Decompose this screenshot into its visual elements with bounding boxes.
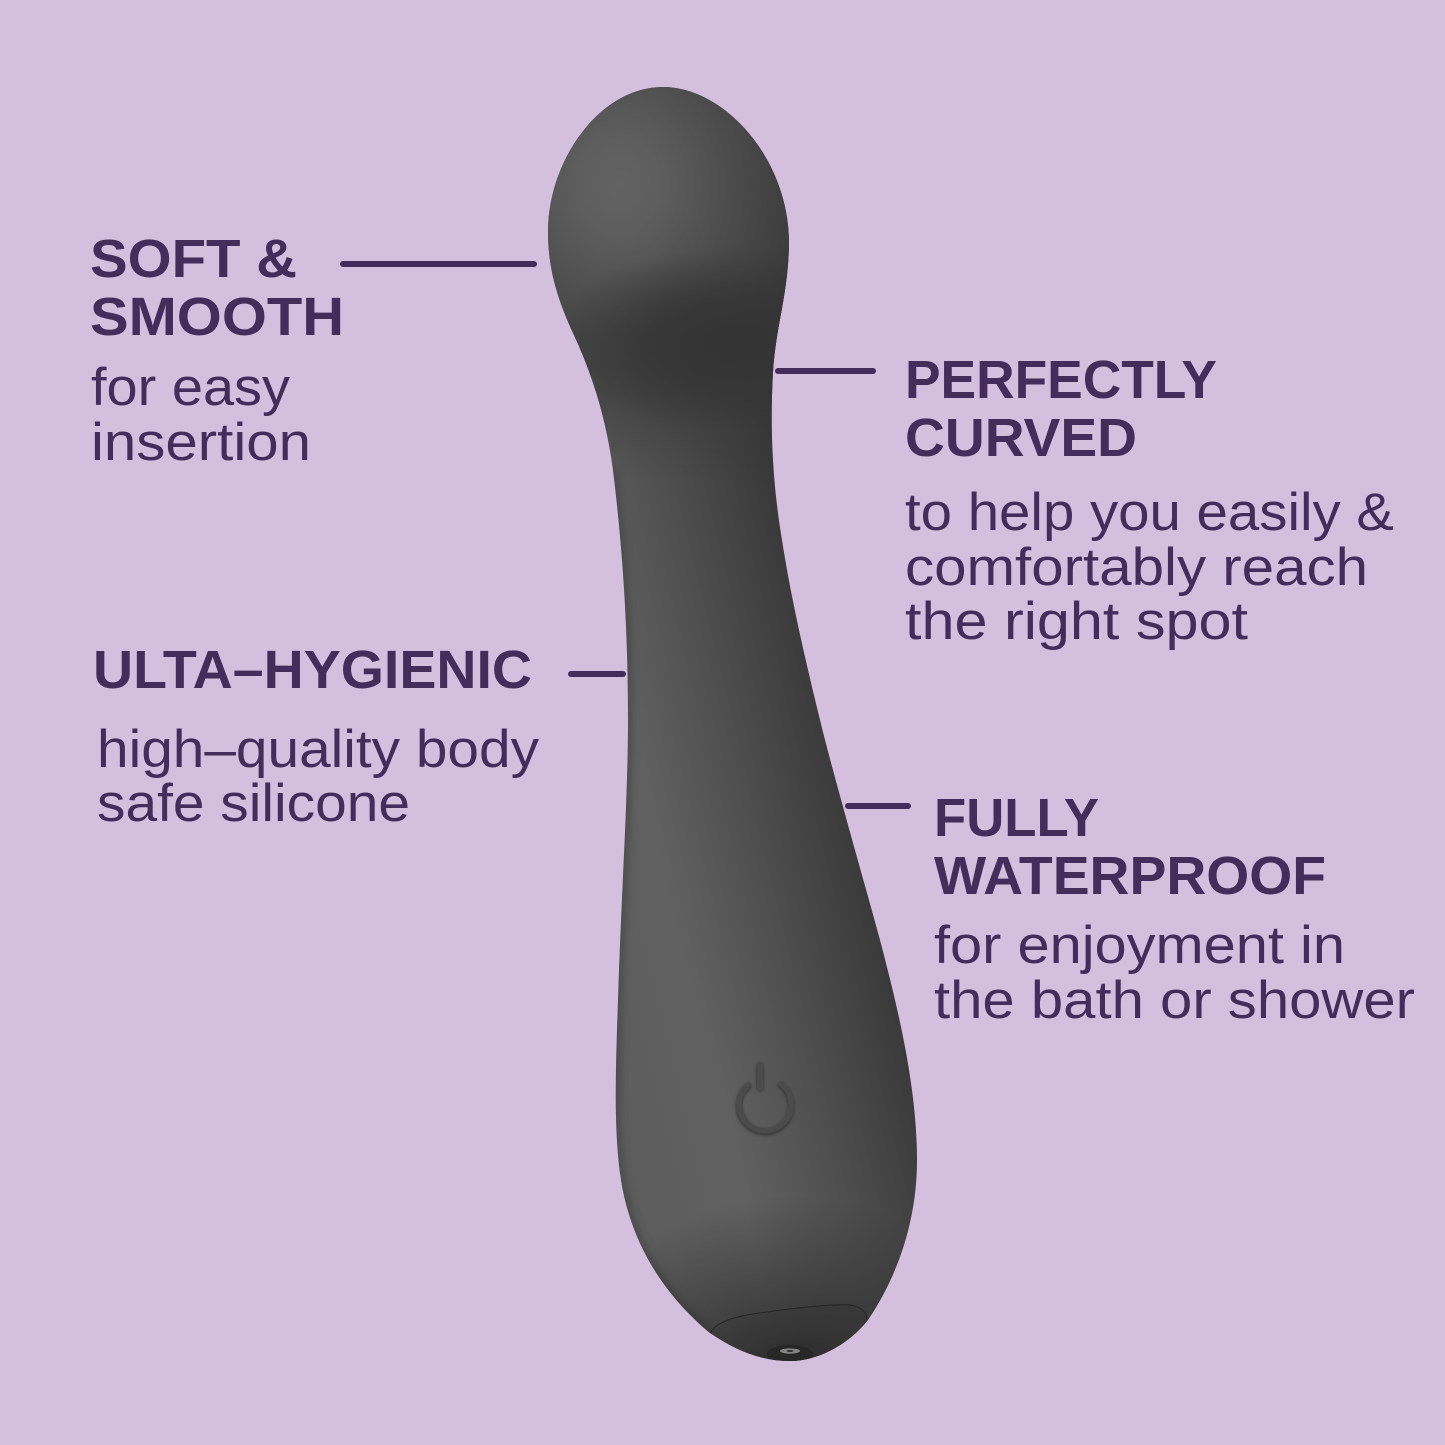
feature: perfectly curved: the right spot [905, 592, 1248, 651]
feature: ultra hygienic: ULTA–HYGIENIC [93, 640, 532, 700]
base cap tone [710, 1305, 867, 1370]
feature: fully waterproof: the bath or shower [934, 971, 1415, 1030]
shading: head tone [548, 87, 789, 455]
feature: fully waterproof: WATERPROOF [934, 846, 1326, 906]
feature: soft and smooth: for easy [91, 358, 291, 417]
feature: perfectly curved: PERFECTLY [905, 350, 1217, 410]
feature: perfectly curved [905, 350, 1394, 651]
product: curved silicone device [548, 87, 917, 1361]
callout line: fully waterproof [845, 803, 911, 809]
feature: fully waterproof: FULLY [934, 788, 1099, 848]
callout line: ultra hygienic [568, 671, 626, 677]
base cap seam [710, 1305, 867, 1333]
feature: fully waterproof [934, 788, 1415, 1030]
feature: ultra hygienic: safe silicone [97, 774, 410, 833]
shading: neck shadow [601, 271, 787, 412]
feature: soft and smooth: SOFT & [90, 229, 297, 289]
shading: bottom shadow [658, 1226, 902, 1361]
feature: soft and smooth [90, 229, 344, 472]
callout line: perfectly curved [775, 368, 876, 374]
feature: ultra hygienic: high–quality body [97, 720, 540, 779]
feature: perfectly curved: comfortably reach [905, 538, 1368, 597]
feature: ultra hygienic [93, 640, 540, 833]
feature: soft and smooth: insertion [91, 413, 311, 472]
feature: perfectly curved: to help you easily & [905, 483, 1394, 542]
shading: left edge [612, 470, 710, 1333]
feature: perfectly curved: CURVED [905, 408, 1137, 468]
feature: fully waterproof: for enjoyment in [934, 916, 1345, 975]
feature: soft and smooth: SMOOTH [90, 287, 344, 347]
icon: power button [739, 1066, 791, 1132]
charging port [767, 1345, 812, 1361]
callout line: soft and smooth [340, 261, 537, 267]
